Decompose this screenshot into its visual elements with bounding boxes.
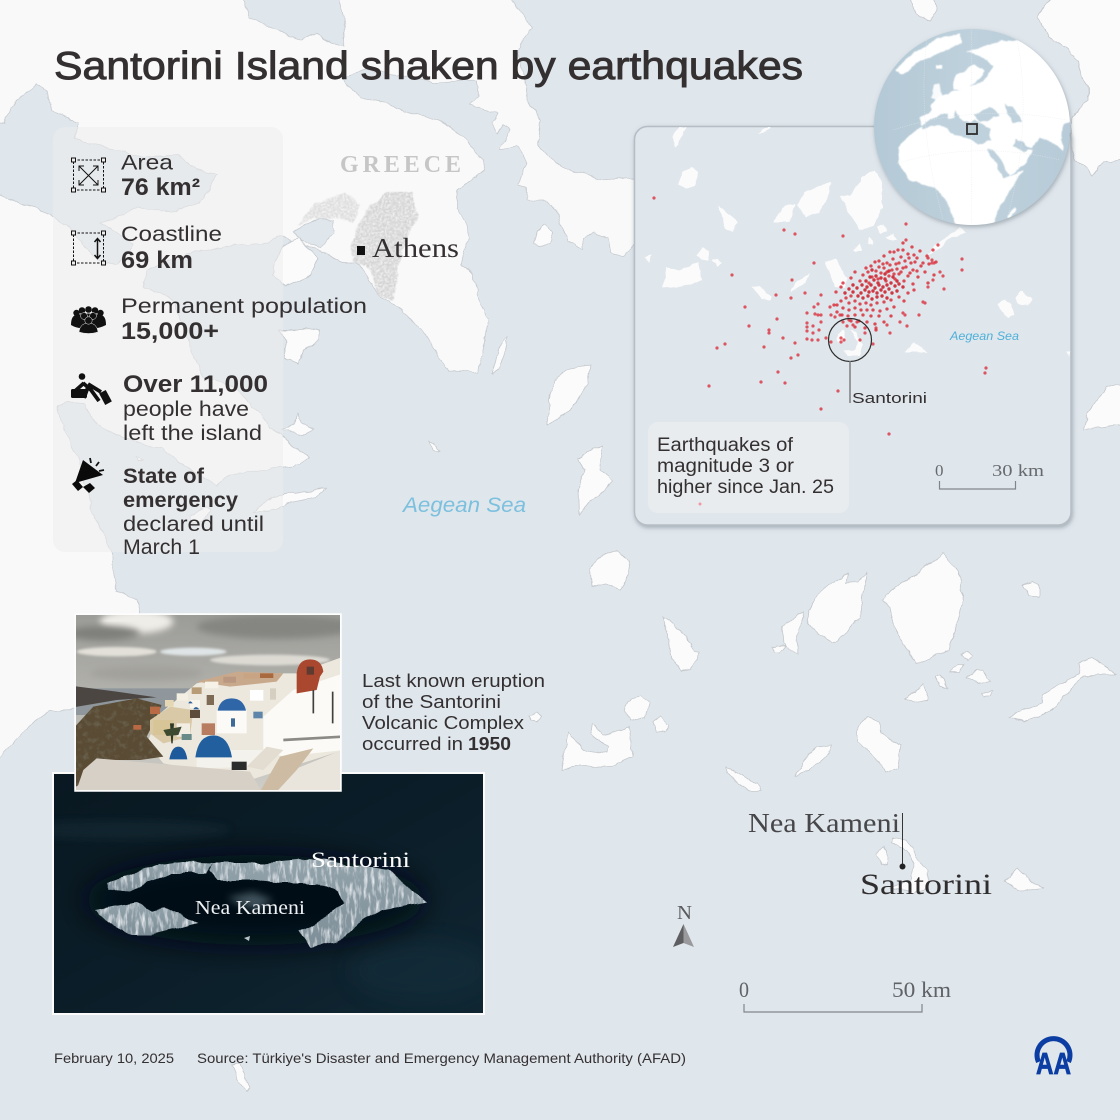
stat: evacuees: Over 11,000 (123, 371, 268, 398)
globe graticule (893, 30, 1067, 223)
sea label: Aegean Sea: Aegean Sea (401, 494, 526, 517)
stat: area (72, 150, 200, 201)
relief image of Santorini (10, 773, 490, 1014)
stat: state of emergency: emergency (123, 488, 238, 512)
stat: area: Area (121, 150, 173, 174)
icon: megaphone (72, 458, 104, 493)
inset map panel (634, 126, 1071, 525)
city label: Athens: Athens (372, 233, 459, 263)
relief label: Nea Kameni: Nea Kameni (195, 898, 306, 919)
northwest arm (108, 862, 213, 892)
main scale bar: 0 (739, 977, 749, 1002)
stat: state of emergency (72, 458, 264, 559)
photo of Oia, Santorini (67, 610, 357, 793)
map label: Santorini: Santorini (860, 868, 992, 901)
stat: coastline: 69 km (121, 247, 193, 274)
legend box: magnitude 3 or (657, 456, 795, 477)
footer source: Source: Türkiye's Disaster and Emergency Management Authority (AFAD) (197, 1050, 686, 1066)
footer date: February 10, 2025 (54, 1050, 174, 1066)
map label: Nea Kameni: Nea Kameni (748, 808, 900, 838)
dense cluster (834, 243, 936, 330)
inset scale bar (935, 461, 1044, 489)
photo: village detail (133, 673, 276, 743)
inset label: Santorini: Santorini (852, 391, 927, 407)
Nea Kameni island (227, 892, 273, 910)
eruption note: Last known eruption (362, 671, 545, 691)
eruption note: 1950 (468, 734, 511, 754)
eruption note: of the Santorini (362, 692, 501, 712)
title: Santorini Island shaken by earthquakes (54, 45, 803, 88)
north arrow (673, 902, 694, 947)
earthquake dots (654, 198, 986, 434)
country label: Greece: GREECE (340, 152, 461, 178)
stat: state of emergency: State of (123, 464, 205, 488)
stat: population: Permanent population (121, 294, 367, 318)
eruption note (362, 671, 545, 754)
main island Thera (210, 858, 427, 948)
eruption note: Volcanic Complex (362, 713, 524, 733)
Nea Kameni leader with dot (900, 813, 906, 870)
legend box (648, 422, 849, 513)
stat: state of emergency: declared until (123, 513, 264, 536)
inset scale bar: 30 km (992, 461, 1044, 480)
stat: coastline: Coastline (121, 222, 222, 246)
inset label: Aegean Sea: Aegean Sea (949, 331, 1019, 343)
AA logo (1036, 1039, 1071, 1081)
stat: evacuees: left the island (123, 422, 262, 445)
icon: area (72, 158, 106, 192)
stat: evacuees: people have (123, 398, 249, 421)
legend box: higher since Jan. 25 (657, 477, 834, 498)
relief label: Santorini: Santorini (311, 847, 410, 872)
inset islands (645, 127, 1070, 357)
stat: state of emergency: March 1 (123, 536, 200, 559)
info panel (53, 127, 283, 552)
AA logo: AA (1036, 1046, 1071, 1081)
globe locator square (967, 124, 977, 134)
main scale bar (739, 977, 951, 1012)
icon: person with luggage (71, 373, 112, 405)
Santorini locator circle (828, 318, 872, 362)
stat: coastline (72, 222, 222, 274)
Santorini leader line (849, 361, 851, 403)
icon: coastline (72, 231, 106, 265)
legend box: Earthquakes of (657, 435, 794, 456)
main scale bar: 50 km (892, 977, 951, 1002)
north arrow: N (677, 902, 692, 924)
eruption note: occurred in (362, 734, 463, 754)
stat: population (71, 294, 367, 345)
inset scale bar: 0 (935, 461, 944, 480)
stat: evacuees (71, 371, 268, 445)
Thirasia island (93, 902, 198, 935)
stat: population: 15,000+ (121, 318, 219, 345)
stat: area: 76 km² (121, 174, 200, 201)
locator globe (874, 29, 1093, 233)
icon: crowd (71, 306, 106, 334)
city marker: Athens (357, 246, 365, 255)
